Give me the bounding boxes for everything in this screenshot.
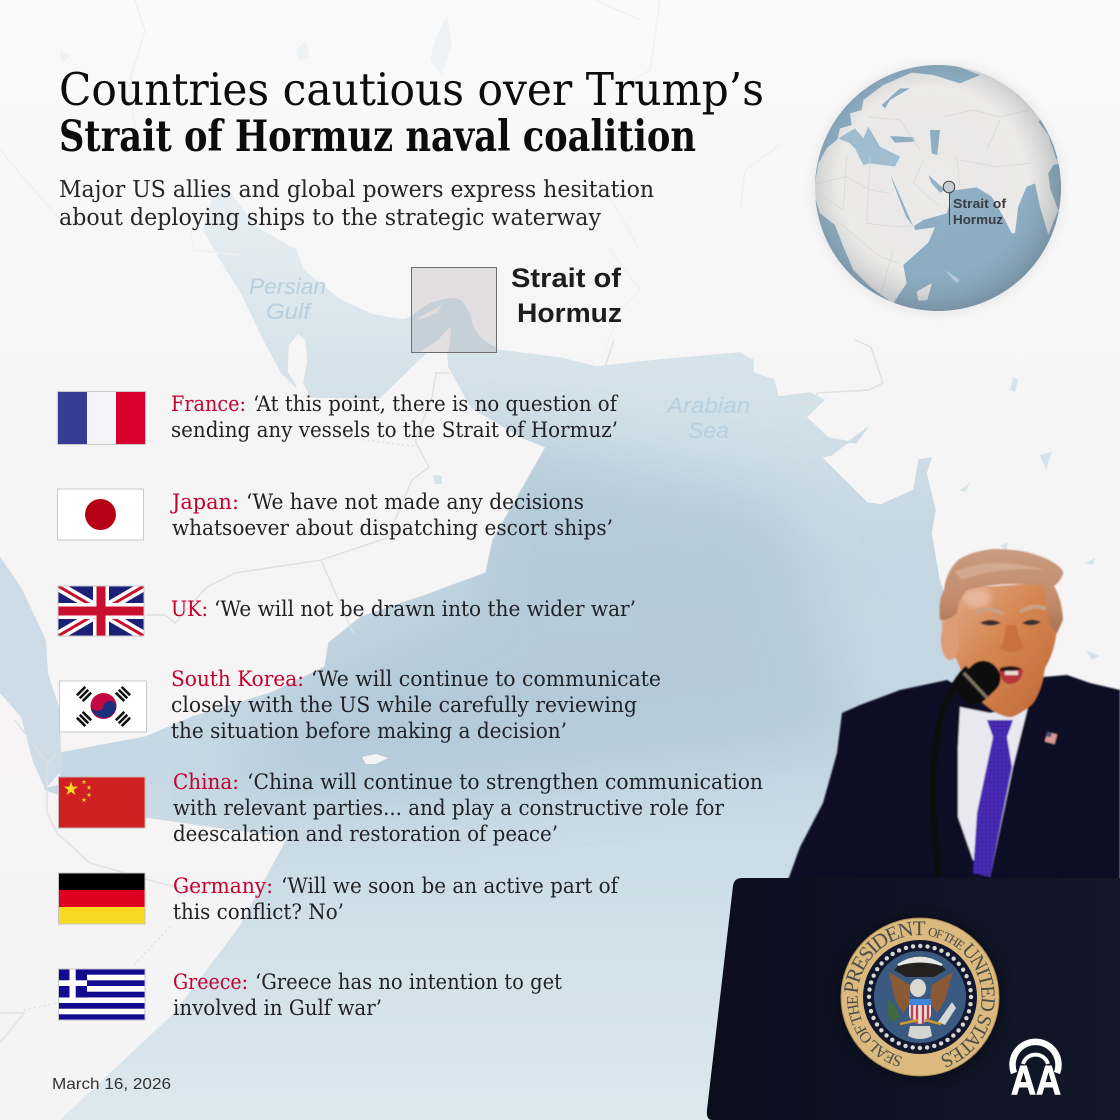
quote: France: ‘At this point, there is no question of xyxy=(253,392,619,417)
flag: China xyxy=(58,777,145,828)
mouth xyxy=(999,666,1023,684)
quote: Japan: ‘We have not made any decisions xyxy=(246,490,584,515)
portrait: speaker at microphone xyxy=(788,549,1120,880)
shirt xyxy=(958,707,1028,877)
map label: Arabian Sea: Arabian xyxy=(665,393,750,418)
quote: Japan xyxy=(170,490,613,541)
flag: Germany xyxy=(58,873,145,924)
flag: Japan xyxy=(58,489,144,540)
quote: South Korea: ‘We will continue to communicate xyxy=(311,667,661,692)
flag: South Korea xyxy=(60,681,146,732)
quote: UK: ‘We will not be drawn into the wider war’ xyxy=(214,597,636,622)
map: small lakes xyxy=(60,15,1100,660)
AA logo xyxy=(1011,1042,1061,1103)
quote: South Korea xyxy=(171,667,661,744)
subtitle xyxy=(59,177,654,231)
seal lettering: SEAL OF THE PRESIDENT OF THE UNITED STATES xyxy=(844,921,995,1068)
map label: Persian Gulf xyxy=(249,274,326,324)
map label: Arabian Sea xyxy=(665,393,750,443)
quote: China: ‘China will continue to strengthen communication xyxy=(247,770,763,795)
globe marker: Strait of Hormuz: Hormuz xyxy=(953,212,1004,227)
flag: France xyxy=(58,392,146,444)
presidential seal xyxy=(840,918,1000,1076)
globe marker: Strait of Hormuz: Strait of xyxy=(953,196,1007,211)
lapel pin xyxy=(1045,732,1057,744)
flag: UK xyxy=(58,586,144,636)
quote: Germany: Germany: xyxy=(173,874,273,899)
quote: China xyxy=(173,770,763,847)
quote: Germany: this conflict? No’ xyxy=(173,900,344,925)
quote: France: France: xyxy=(171,392,246,417)
map label: Persian Gulf: Gulf xyxy=(266,299,313,324)
ear xyxy=(941,620,959,660)
hair highlight xyxy=(955,563,1045,580)
inset heading: Hormuz xyxy=(517,298,622,328)
tie xyxy=(973,720,1013,877)
nose xyxy=(1000,625,1024,652)
title xyxy=(59,63,764,162)
quote: South Korea: closely with the US while carefully reviewing xyxy=(171,693,637,718)
title: Countries cautious over Trump’s xyxy=(59,63,764,116)
AA logo: AA xyxy=(1011,1057,1061,1103)
map: sea and coastlines xyxy=(0,192,962,1120)
subtitle: Major US allies and global powers express hesitation xyxy=(59,177,654,203)
quote: Japan: Japan: xyxy=(170,490,239,515)
quote: Japan: whatsoever about dispatching escort ships’ xyxy=(172,516,613,541)
seal: eagle xyxy=(887,956,956,1039)
quote: South Korea: the situation before making a decision’ xyxy=(171,719,567,744)
microphone xyxy=(950,654,1007,711)
eyes and brows xyxy=(975,607,1046,626)
globe marker: Strait of Hormuz xyxy=(943,181,1007,227)
quote: France xyxy=(171,392,619,443)
microphone stand xyxy=(933,668,968,877)
quote: Greece: Greece: xyxy=(173,970,248,995)
inset heading xyxy=(511,263,622,328)
subtitle: about deploying ships to the strategic waterway xyxy=(59,205,601,231)
quote: South Korea: South Korea: xyxy=(171,667,304,692)
quote: Germany xyxy=(173,874,620,925)
podium xyxy=(707,878,1120,1120)
suit xyxy=(788,675,1120,880)
quote: France: sending any vessels to the Strait of Hormuz’ xyxy=(171,418,618,443)
map label: Arabian Sea: Sea xyxy=(688,418,729,443)
flag: Greece xyxy=(58,969,145,1020)
locator globe xyxy=(800,60,1067,320)
hair xyxy=(940,549,1063,633)
quote: Greece: involved in Gulf war’ xyxy=(173,996,382,1021)
quote: Greece xyxy=(173,970,562,1021)
date: March 16, 2026 xyxy=(52,1076,171,1093)
neck and face xyxy=(942,583,1058,717)
map: borders and lakes xyxy=(0,0,883,1043)
quote: China: China: xyxy=(173,770,239,795)
map label: Persian Gulf: Persian xyxy=(249,274,326,299)
quote: China: deescalation and restoration of peace’ xyxy=(173,822,558,847)
quote: UK: UK: xyxy=(171,597,208,622)
quote: China: with relevant parties... and play a constructive role for xyxy=(173,796,725,821)
quote: Greece: ‘Greece has no intention to get xyxy=(255,970,562,995)
inset heading: Strait of xyxy=(511,263,622,293)
inset map: Strait of Hormuz xyxy=(411,268,497,352)
forehead highlight xyxy=(963,588,991,608)
title: Strait of Hormuz naval coalition xyxy=(59,112,696,162)
quote: Germany: ‘Will we soon be an active part of xyxy=(281,874,620,899)
